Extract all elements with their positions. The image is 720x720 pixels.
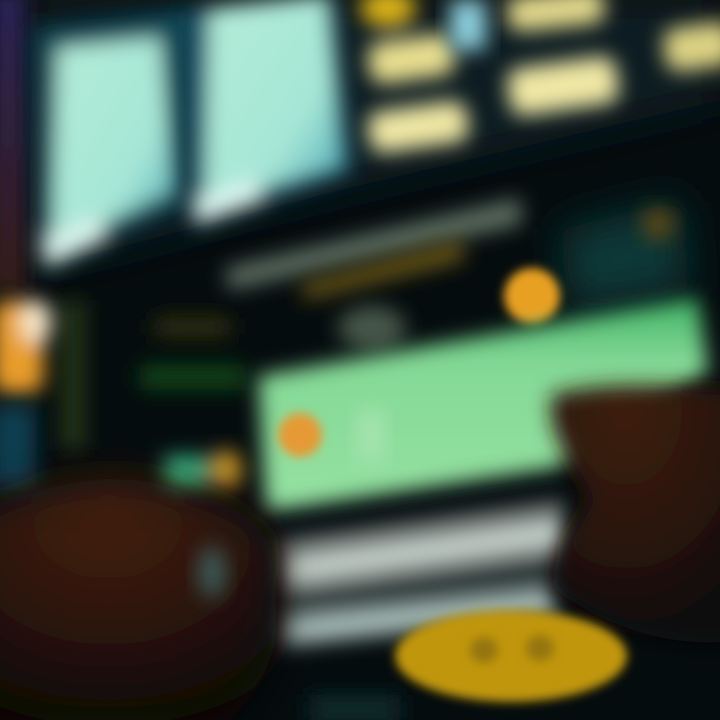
purple strip at left edge — [0, 0, 26, 290]
small green and orange lights — [164, 450, 242, 490]
light blue tab — [450, 0, 486, 50]
left hand — [0, 479, 276, 720]
dark teal patch on right — [560, 200, 690, 310]
blurred gold text band — [302, 240, 464, 300]
left orange light — [0, 300, 52, 394]
dim green text blobs on left — [60, 300, 245, 450]
pale mark on card — [358, 410, 384, 460]
green card panel — [258, 298, 708, 512]
blurred grey heading band — [226, 198, 522, 290]
orange dot on card — [278, 413, 322, 457]
gold coin — [395, 610, 627, 702]
right hand — [551, 385, 720, 643]
small amber dot upper right — [642, 208, 674, 240]
orange coin on dark band — [504, 268, 560, 324]
left mint screen panel — [35, 10, 185, 270]
blue patch bottom left — [0, 405, 36, 490]
coin symbols — [470, 635, 554, 663]
yellow pill buttons — [360, 0, 720, 155]
pale gap between fingers — [198, 546, 226, 598]
teal glow at bottom — [310, 695, 400, 720]
grey blob — [338, 306, 406, 350]
right mint screen panel — [185, 0, 352, 228]
upper screen background — [30, 0, 720, 270]
grey-white stripes below card — [276, 490, 566, 646]
